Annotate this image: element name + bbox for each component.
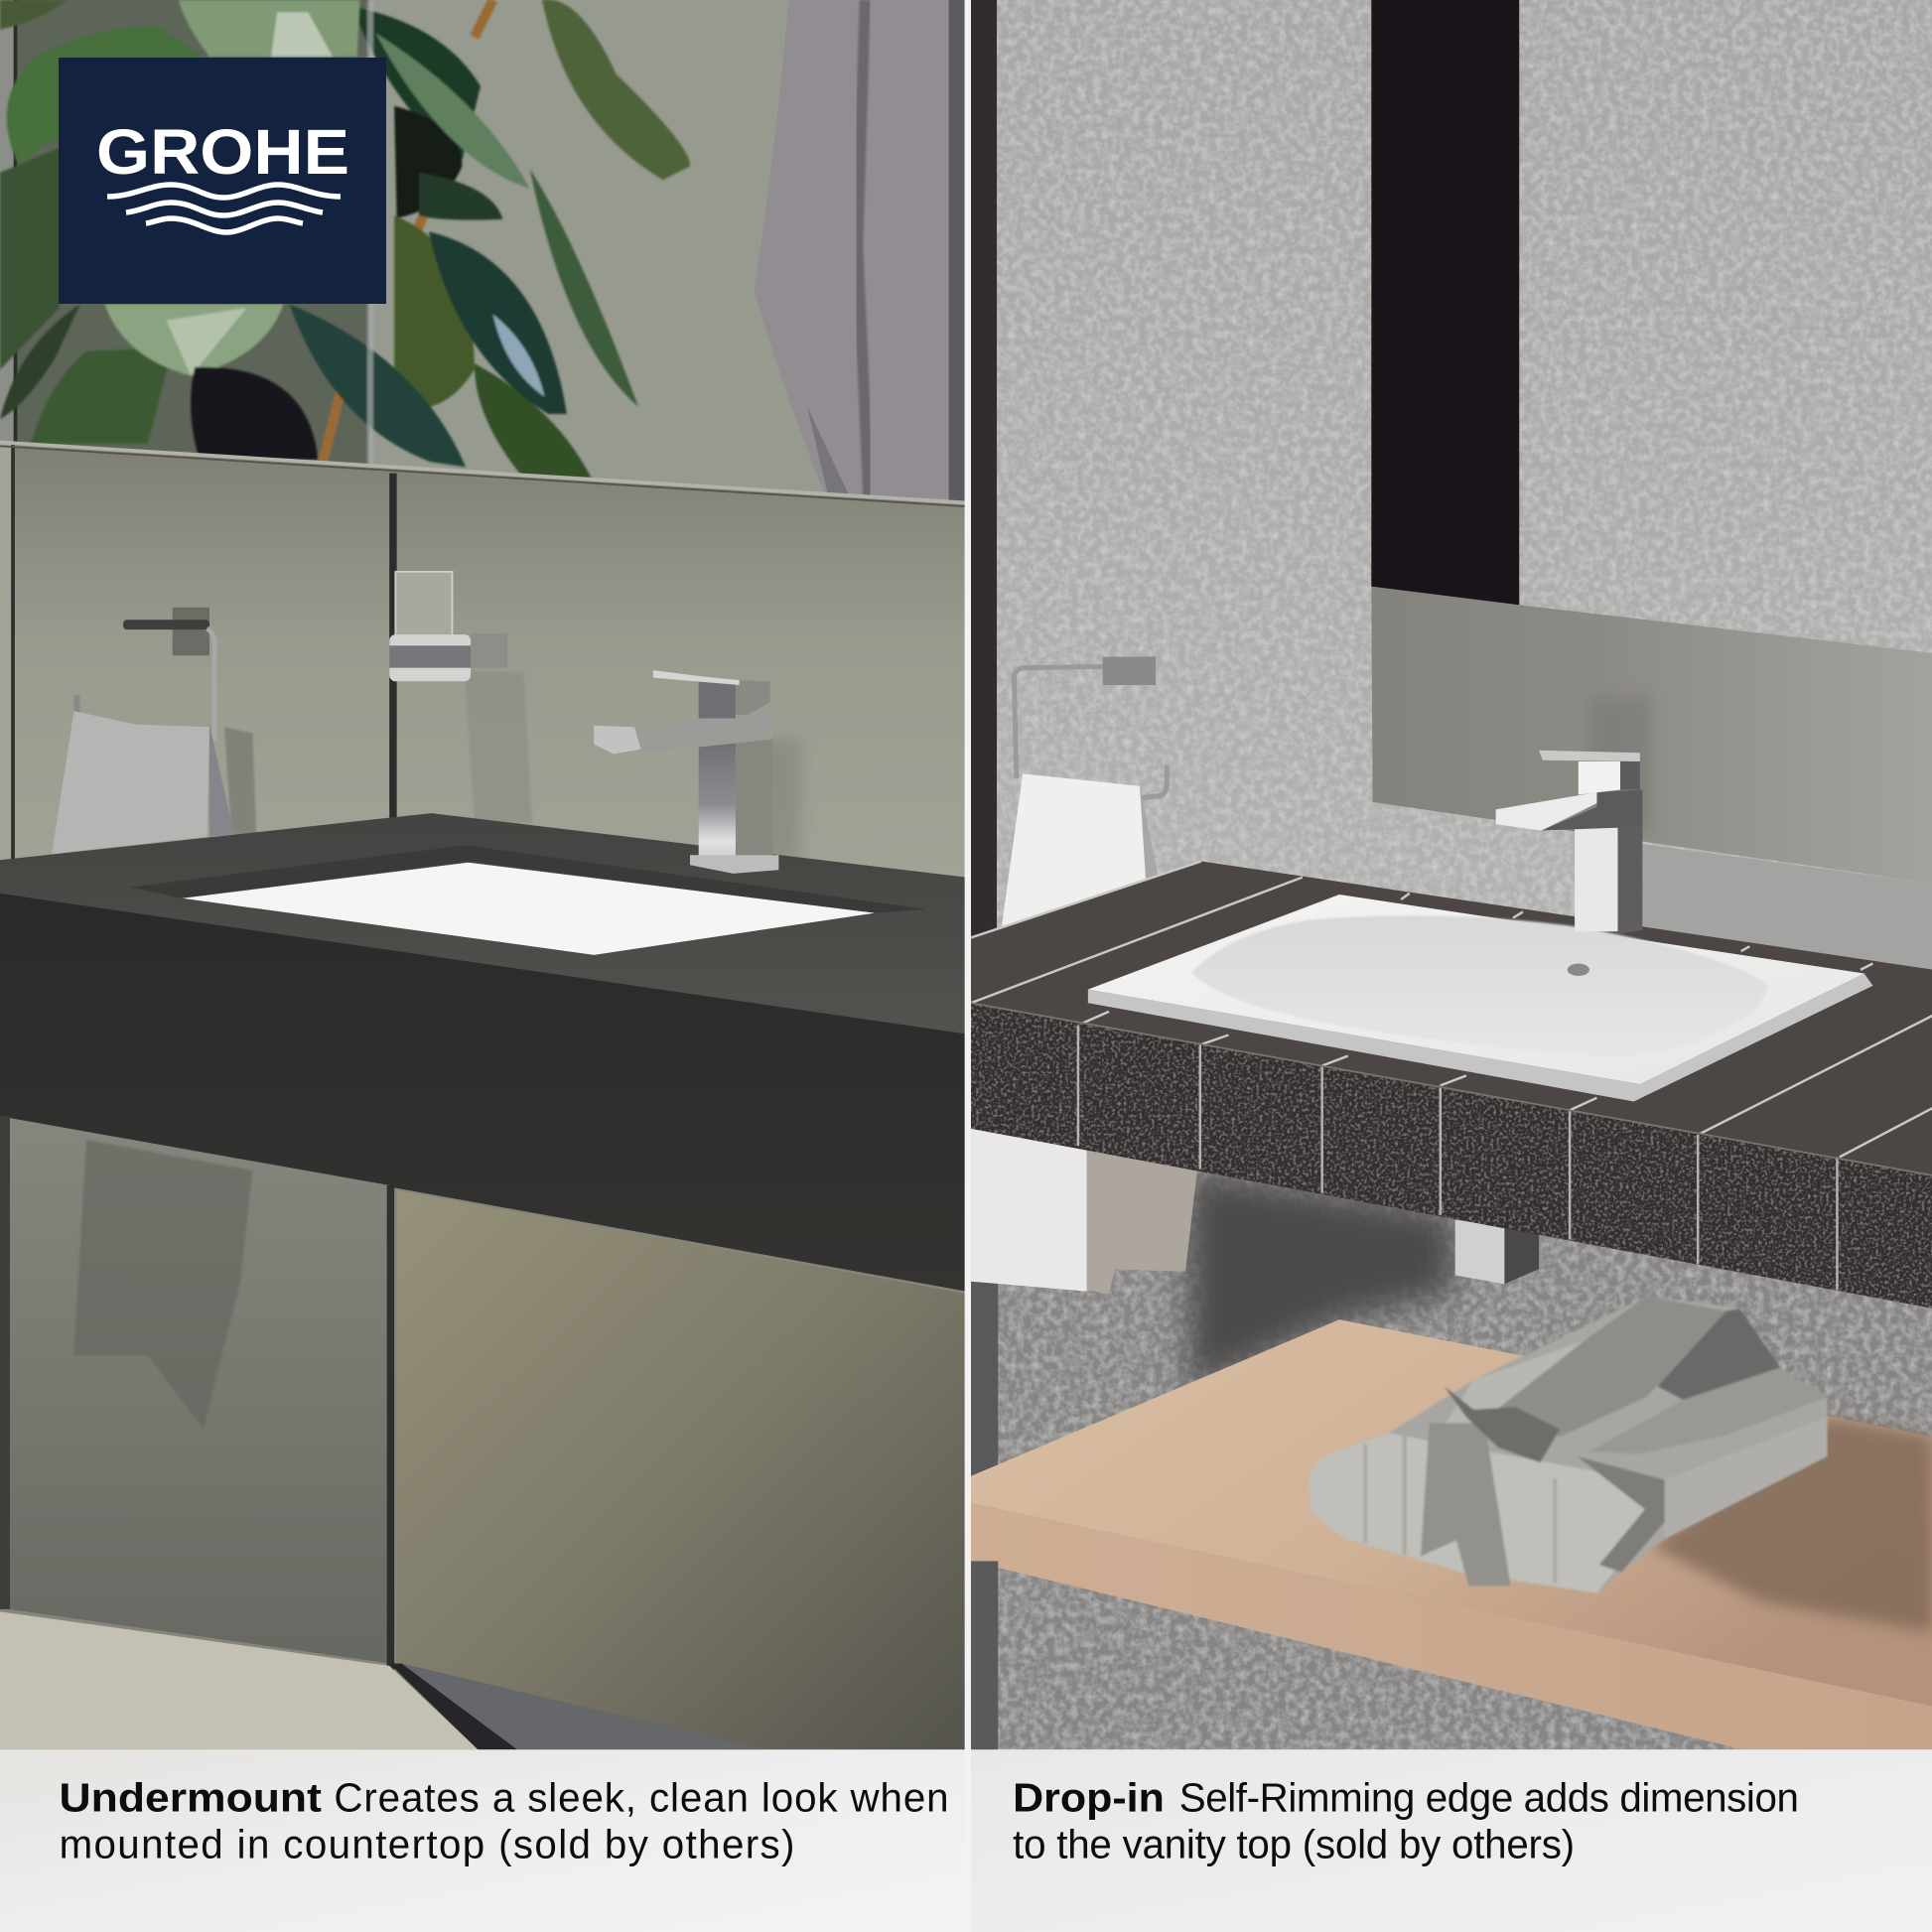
left dark strip xyxy=(971,0,997,939)
wooden shelf xyxy=(971,1319,1932,1762)
caption text: drop-in: Drop-in xyxy=(1013,1774,1165,1820)
logo: GROHE xyxy=(59,58,386,304)
hanging towel xyxy=(971,1126,1197,1294)
mirror reflection with plant xyxy=(0,0,965,505)
drop-in sink xyxy=(1088,895,1872,1102)
wall shadow behind faucet xyxy=(772,739,802,858)
faucet xyxy=(594,670,778,874)
caption text: drop-in: Self-Rimming edge adds dimension xyxy=(1179,1774,1799,1820)
curtain xyxy=(755,0,965,502)
mirror black band xyxy=(1371,0,1519,605)
towel ring and towel xyxy=(1002,656,1167,926)
caption text: undermount: Creates a sleek, clean look when xyxy=(334,1774,949,1820)
folded bathrobe xyxy=(1309,1297,1828,1593)
vanity countertop surface xyxy=(0,813,966,1034)
vanity front face xyxy=(0,894,966,1292)
caption text: drop-in: to the vanity top (sold by others) xyxy=(1013,1822,1575,1867)
logo waves xyxy=(107,185,341,232)
caption text: undermount: mounted in countertop (sold by others) xyxy=(60,1822,794,1867)
drain pipe xyxy=(1455,1220,1539,1284)
white undermount sink xyxy=(129,845,926,955)
tiled countertop surface xyxy=(971,862,1932,1175)
caption text: undermount: Undermount xyxy=(60,1774,322,1820)
divider line xyxy=(965,0,971,1932)
towel ring and towel xyxy=(52,608,256,854)
tumbler holder xyxy=(389,572,532,823)
wall below counter xyxy=(971,1134,1932,1749)
plant xyxy=(0,0,690,479)
mirror lower reflection xyxy=(1371,587,1932,884)
lower cabinet panels xyxy=(0,1116,966,1749)
tiled countertop front xyxy=(971,1003,1932,1309)
wall strip right of faucet xyxy=(1642,844,1932,969)
floor xyxy=(0,1611,479,1749)
logo wordmark: GROHE xyxy=(96,116,349,188)
caption strip: undermount xyxy=(0,1749,965,1932)
caption strip: drop-in xyxy=(971,1749,1932,1932)
panel: undermount photo xyxy=(0,0,966,1749)
tall faucet xyxy=(1496,751,1642,934)
panel: drop-in photo xyxy=(971,0,1932,1762)
upper wall panels xyxy=(0,443,965,888)
